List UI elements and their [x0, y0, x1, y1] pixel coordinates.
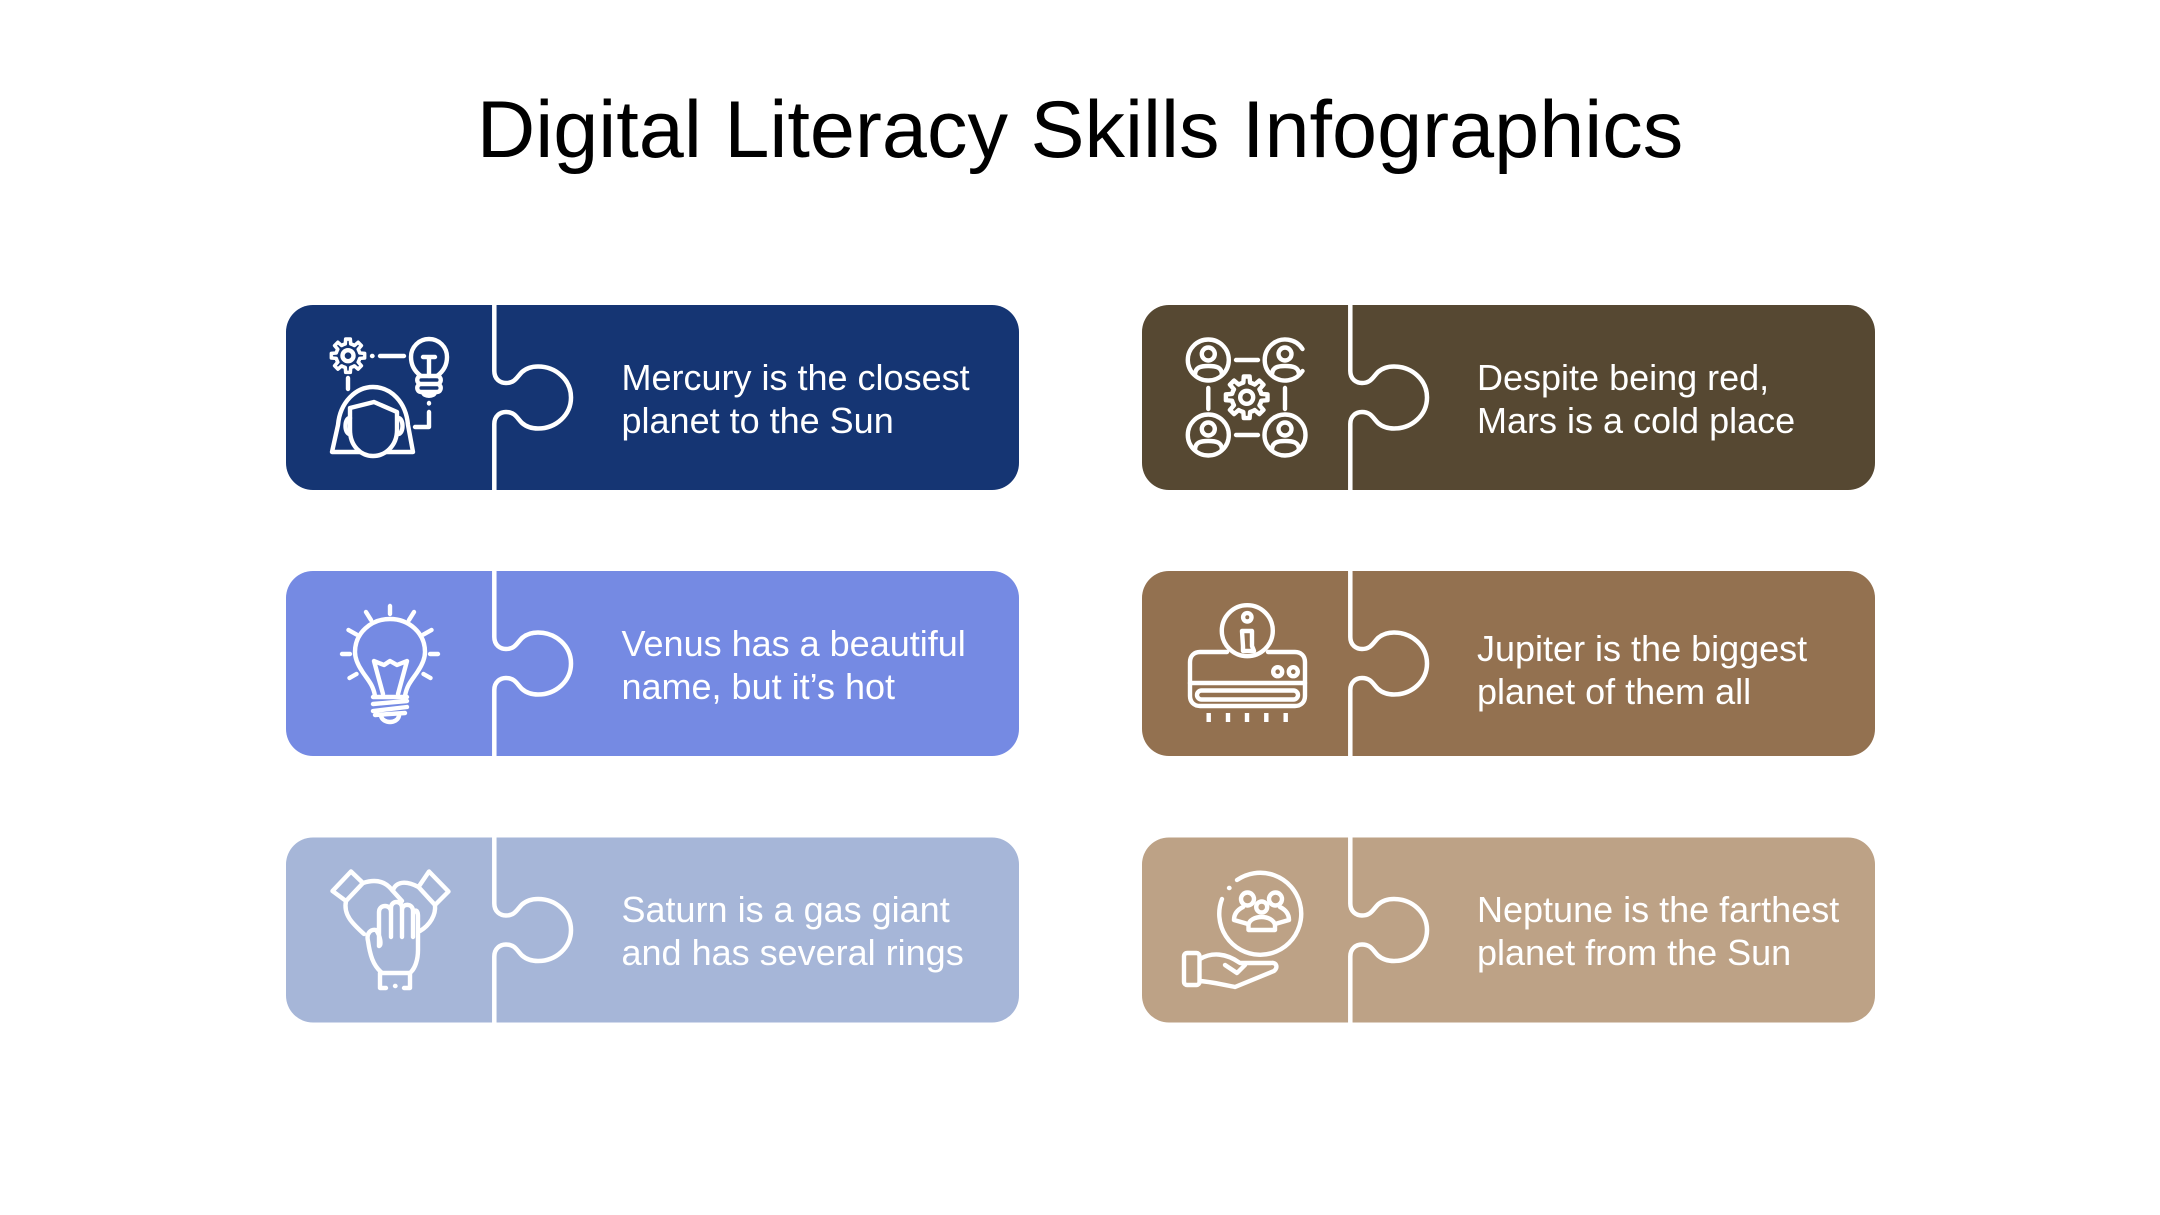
- icon: light bulb: [342, 606, 438, 722]
- title: Digital Literacy Skills Infographics: [477, 85, 1683, 175]
- panel: Mercury: [286, 305, 1019, 490]
- panel: Neptune: [1142, 838, 1875, 1022]
- icon: air conditioner with info: [1190, 605, 1305, 722]
- text: Venus: name, but it’s hot: [622, 666, 895, 707]
- text: Venus: Venus has a beautiful: [622, 623, 966, 664]
- text: Saturn: Saturn is a gas giant: [622, 889, 950, 930]
- text: Mercury: Mercury is the closest: [622, 357, 970, 398]
- text: Jupiter: Jupiter is the biggest: [1477, 628, 1807, 669]
- icon: person with gear and bulb: [331, 339, 447, 456]
- text: Saturn: and has several rings: [622, 932, 964, 973]
- icon: hand holding people: [1184, 873, 1301, 987]
- text: Mars: Despite being red,: [1477, 357, 1769, 398]
- panel: Saturn: [286, 838, 1019, 1022]
- text: Mars: Mars is a cold place: [1477, 400, 1795, 441]
- panel: Jupiter: [1142, 571, 1875, 756]
- panel: Mars: [1142, 305, 1875, 490]
- icon: connected people with gear: [1188, 339, 1306, 456]
- text: Neptune: Neptune is the farthest: [1477, 889, 1839, 930]
- icon: stacked hands: [332, 872, 448, 988]
- text: Neptune: planet from the Sun: [1477, 932, 1791, 973]
- text: Mercury: planet to the Sun: [622, 400, 894, 441]
- panel: Venus: [286, 571, 1019, 756]
- text: Jupiter: planet of them all: [1477, 671, 1751, 712]
